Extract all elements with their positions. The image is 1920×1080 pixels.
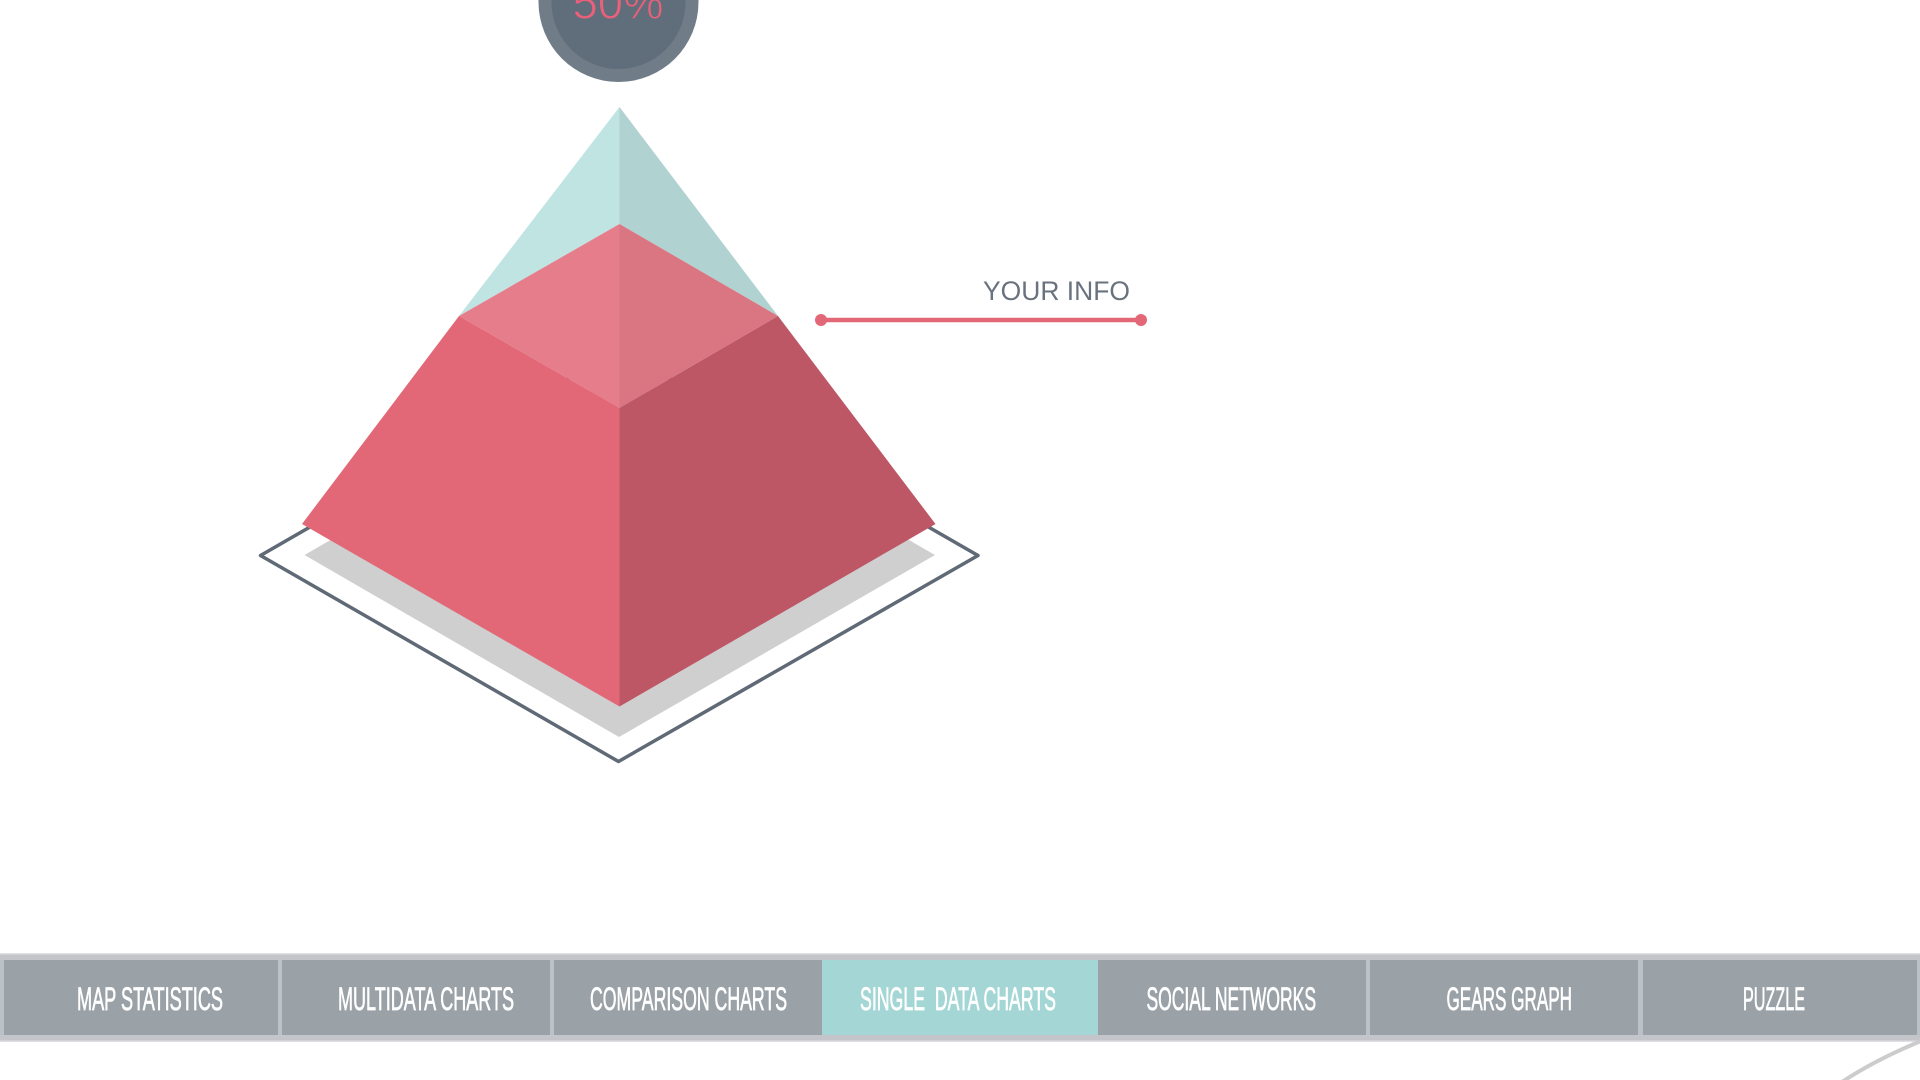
pyramid top: teal bbox=[459, 107, 778, 316]
tab: puzzle: PUZZLE bbox=[1743, 981, 1805, 1017]
tab: map statistics: MAP STATISTICS bbox=[77, 981, 223, 1017]
tab: social networks bbox=[1098, 960, 1366, 1035]
pyramid base: pink bbox=[302, 316, 936, 706]
pyramid middle: light pink bbox=[459, 224, 778, 408]
tab: comparison charts bbox=[554, 960, 822, 1035]
tab: gears graph bbox=[1370, 960, 1638, 1035]
callout leader line bbox=[815, 314, 1147, 326]
callout: your info bbox=[815, 276, 1147, 326]
tab: multidata charts: MULTIDATA CHARTS bbox=[338, 981, 514, 1017]
platform outline bbox=[260, 349, 978, 762]
tab: comparison charts: COMPARISON CHARTS bbox=[590, 981, 787, 1017]
tab: single data charts (active): SINGLE DATA CHARTS bbox=[860, 981, 1056, 1017]
percentage badge bbox=[538, 0, 698, 82]
callout label: YOUR INFO bbox=[983, 276, 1130, 306]
tab: social networks: SOCIAL NETWORKS bbox=[1146, 981, 1316, 1017]
pyramid chart bbox=[302, 107, 936, 706]
tab: gears graph: GEARS GRAPH bbox=[1446, 981, 1572, 1017]
tab: map statistics bbox=[4, 960, 278, 1035]
tab: multidata charts bbox=[282, 960, 550, 1035]
tab: puzzle bbox=[1643, 960, 1917, 1035]
platform shadow bbox=[304, 373, 935, 737]
corner arc bbox=[1842, 1041, 1920, 1080]
navigation bar bbox=[0, 953, 1920, 1042]
tab: single data charts (active) bbox=[822, 960, 1098, 1035]
